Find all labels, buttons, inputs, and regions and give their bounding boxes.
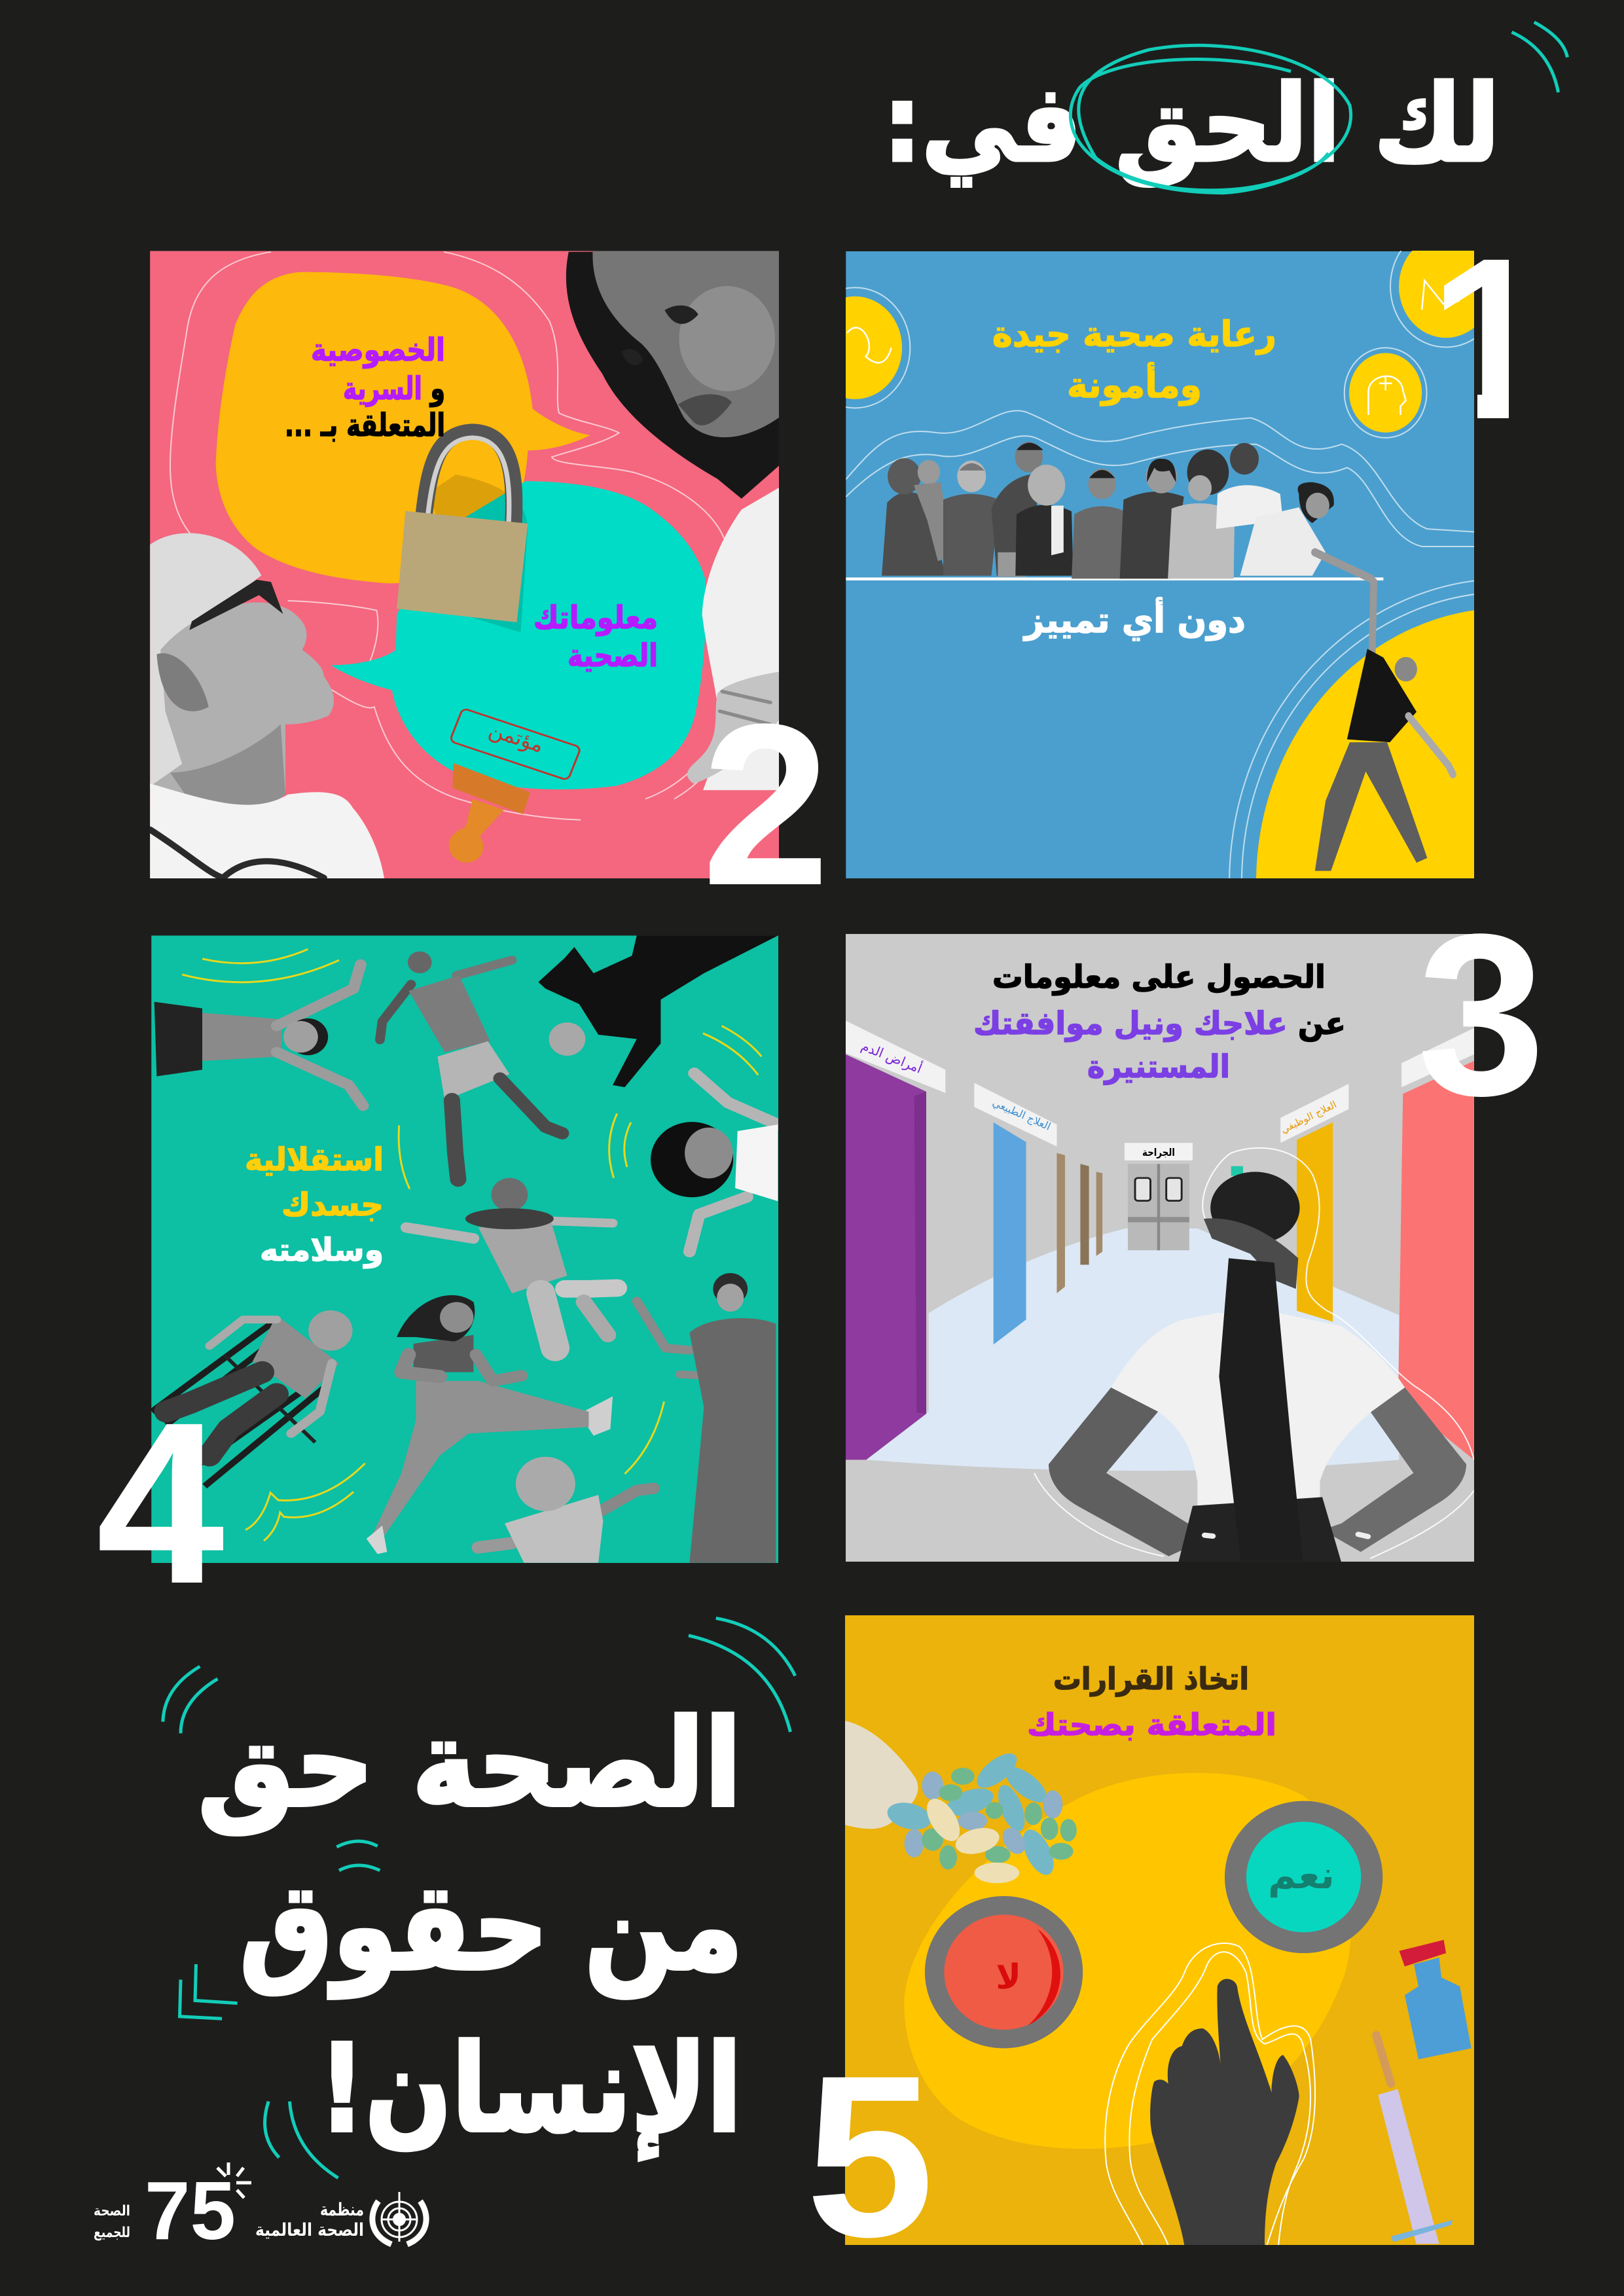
WHO name line 2: الصحة العالمية	[255, 2220, 364, 2240]
headline line 1: الصحة حق	[198, 1694, 742, 1835]
panel 5 text: about your health: المتعلقة بصحتك	[1027, 1707, 1276, 1742]
panel 2 text: health: الصحية	[568, 637, 658, 674]
panel 2 text: privacy: الخصوصية	[311, 332, 445, 368]
panel 2: privacy and confidentiality	[150, 251, 780, 880]
panel 4: bodily autonomy	[151, 935, 778, 1563]
number 4: 4	[96, 1374, 226, 1632]
slogan line 2: للجميع	[94, 2225, 130, 2241]
panel 2 text: your information: معلوماتك	[533, 600, 658, 636]
door sign: physiotherapy: العلاج الطبيعي	[990, 1096, 1053, 1134]
75 years mark: 75	[145, 2164, 236, 2257]
panel 3 artwork	[846, 934, 1475, 1563]
door sign: blood disorders: أمراض الدم	[859, 1037, 924, 1077]
panel 4 text: your body: جسدك	[281, 1187, 384, 1223]
panel 5: making health decisions	[845, 1615, 1475, 2246]
door sign: surgery: الجراحة	[1142, 1146, 1175, 1158]
panel 5 text: making decisions: اتخاذ القرارات	[1053, 1661, 1249, 1696]
headline: health is a human right	[198, 1694, 743, 2160]
panel 4 artwork	[151, 935, 778, 1563]
panel 1: good and safe health care	[846, 251, 1474, 878]
number 3: 3	[1417, 886, 1545, 1143]
panel 5 artwork	[845, 1615, 1475, 2246]
sun rays	[217, 2162, 251, 2198]
number 2: 2	[702, 675, 830, 933]
button label: no: لا	[996, 1958, 1021, 1997]
panel 4 text: autonomy: استقلالية	[245, 1141, 384, 1178]
panel 1 text: and safe: ومأمونة	[1067, 362, 1202, 406]
number 1: 1	[1428, 209, 1557, 467]
WHO emblem	[372, 2192, 426, 2244]
headline accent arcs	[163, 1618, 795, 2178]
title: لك الحق في:	[883, 63, 1500, 187]
slogan line 1: الصحة	[94, 2203, 130, 2219]
stamp word: confidential: مؤتمن	[486, 717, 547, 758]
button label: yes: نعم	[1268, 1853, 1335, 1897]
panel 3: access to information	[846, 934, 1475, 1563]
panel 2 text: related to: المتعلقة بـ ...	[285, 407, 445, 444]
panel 1 artwork	[846, 251, 1474, 878]
panel 2 artwork	[150, 251, 780, 880]
WHO name line 1: منظمة	[320, 2200, 364, 2220]
door sign: occupational therapy: العلاج الوظيفي	[1279, 1098, 1339, 1136]
panel 3 text: access to information: الحصول على معلومات	[992, 959, 1326, 996]
headline line 3: الإنسان!	[319, 2019, 742, 2160]
panel 3 text: about treatment and consent: عن علاجك ونيل موافقتك	[973, 1005, 1346, 1042]
title scribble and accent arcs	[1070, 22, 1567, 193]
panel 1 text: without discrimination: دون أي تمييز	[1022, 597, 1246, 641]
panel 4 text: and its safety: وسلامته	[260, 1232, 384, 1268]
panel 3 text: informed: المستنيرة	[1087, 1049, 1230, 1085]
number 5: 5	[806, 2027, 934, 2285]
logos footer	[94, 2162, 426, 2257]
headline line 2: من حقوق	[240, 1857, 743, 1998]
panel 1 text: good and safe care: رعاية صحية جيدة	[992, 314, 1276, 355]
panel 2 text: and confidentiality: و السرية	[343, 370, 445, 407]
